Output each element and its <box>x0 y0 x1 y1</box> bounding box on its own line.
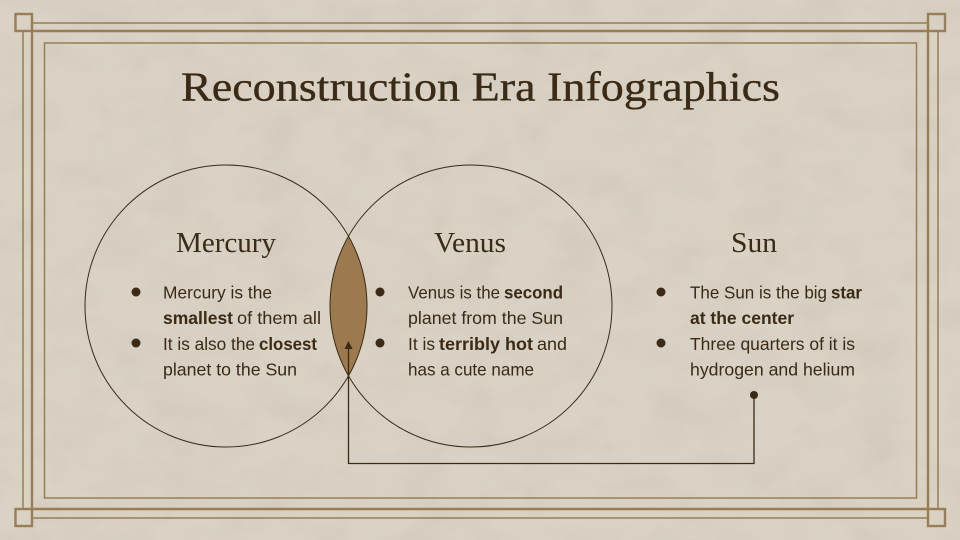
text block: Sun: hydrogen and helium <box>690 360 855 380</box>
text block: Venus: has a cute name <box>408 360 534 380</box>
text block: Mercury: planet to the Sun <box>163 360 297 380</box>
circle: Mercury <box>85 165 367 447</box>
heading: Mercury: Mercury <box>176 228 276 259</box>
text block: Mercury: Mercury is the <box>163 282 272 302</box>
heading: Venus: Venus <box>434 228 506 259</box>
circle: Venus <box>330 165 612 447</box>
title: Reconstruction Era Infographics <box>181 64 780 110</box>
text block: Sun: star <box>831 282 862 302</box>
text block: Mercury: closest <box>259 334 317 354</box>
text block: Venus: and <box>537 334 567 354</box>
heading: Sun: Sun <box>731 228 777 259</box>
venn diagram <box>85 165 612 447</box>
text block: Venus: planet from the Sun <box>408 308 563 328</box>
connector arrow: Sun to overlap <box>344 341 758 464</box>
text block: Mercury: of them all <box>237 308 321 328</box>
text block: Venus: second <box>504 282 563 302</box>
text block: Sun: The Sun is the big <box>690 282 827 302</box>
text block: Venus <box>376 282 567 380</box>
text block: Venus: terribly hot <box>439 334 533 354</box>
text block: Mercury: smallest <box>163 308 233 328</box>
text block: Mercury <box>132 282 321 380</box>
venn overlap <box>330 236 367 376</box>
text block: Sun: Three quarters of it is <box>690 334 855 354</box>
text block: Venus: Venus is the <box>408 282 500 302</box>
text block: Sun: at the center <box>690 308 794 328</box>
text block: Mercury: It is also the <box>163 334 255 354</box>
text block: Venus: It is <box>408 334 435 354</box>
text block: Sun <box>656 282 862 380</box>
